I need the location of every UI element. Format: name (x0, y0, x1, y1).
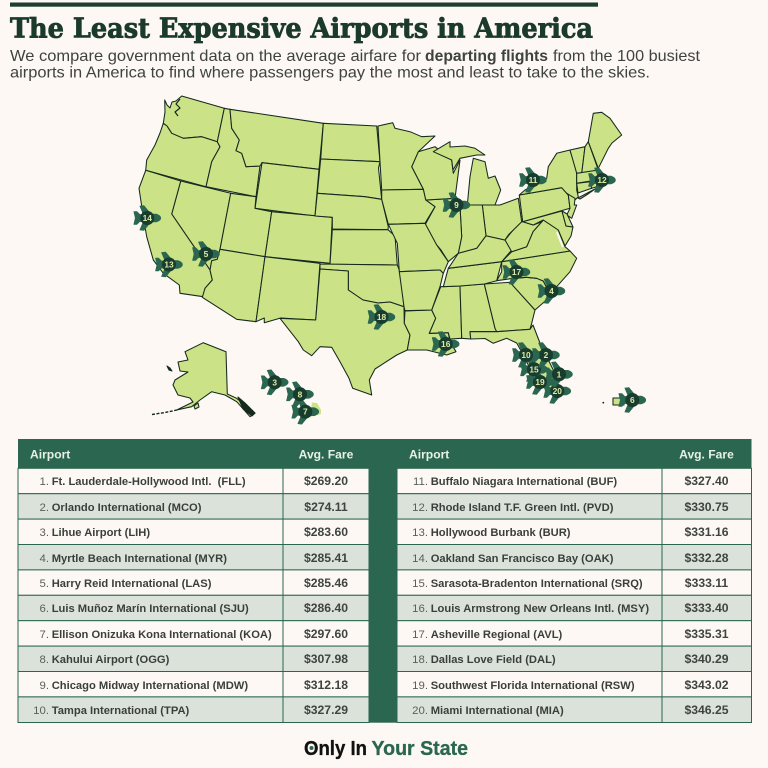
row 7: $297.60 (304, 627, 348, 641)
marker 10 Tampa (512, 342, 540, 368)
intro text: departing flights (425, 48, 548, 65)
row 16 (397, 595, 752, 621)
row 17 (397, 621, 752, 646)
left table rows (18, 468, 369, 722)
marker 13 Burbank: 13 (164, 260, 174, 270)
marker 8 Kahului (286, 382, 314, 407)
row 4: $285.41 (304, 551, 348, 565)
marker 18 Dallas: 18 (377, 312, 386, 322)
row 3 (18, 519, 369, 544)
row 10 (18, 697, 369, 722)
row 15: 15. (412, 578, 428, 590)
row 14: Oakland San Francisco Bay (OAK) (431, 553, 614, 565)
row 8: Kahului Airport (OGG) (52, 654, 170, 666)
row 17: $335.31 (684, 627, 729, 641)
header: left table: Avg. Fare (299, 448, 354, 462)
row 3: 3. (40, 527, 49, 539)
Alaska (152, 343, 255, 417)
marker 1 Ft. Lauderdale: 1 (557, 369, 562, 379)
row 1: $269.20 (304, 474, 348, 488)
marker 13 Burbank (156, 252, 182, 277)
marker 3 Lihue (261, 370, 288, 395)
marker 6 San Juan (619, 388, 646, 412)
row 16: Louis Armstrong New Orleans Intl. (MSY) (431, 603, 649, 615)
row 14 (397, 544, 752, 570)
row 4: Myrtle Beach International (MYR) (52, 553, 227, 565)
row 2: Orlando International (MCO) (52, 502, 202, 514)
marker 4 Myrtle Beach (538, 278, 565, 304)
logo: Your State (372, 737, 468, 760)
row 20: Miami International (MIA) (431, 705, 564, 717)
row 6 (18, 595, 369, 621)
row 18: Dallas Love Field (DAL) (431, 654, 556, 666)
row 1: 1. (40, 476, 49, 488)
row 8: 8. (40, 654, 49, 666)
row 7: 7. (40, 629, 49, 641)
row 12: 12. (412, 502, 428, 514)
marker 11 Buffalo (520, 168, 546, 192)
row 6: Luis Muñoz Marín International (SJU) (52, 603, 249, 615)
row 9 (18, 672, 369, 697)
row 2: 2. (40, 502, 49, 514)
marker 16 New Orleans: 16 (441, 339, 451, 349)
marker 4 Myrtle Beach: 4 (549, 286, 554, 296)
marker 17 Asheville (503, 260, 530, 284)
row 12: $330.75 (684, 500, 729, 514)
row 1: Ft. Lauderdale-Hollywood Intl. (FLL) (52, 476, 246, 488)
row 11: $327.40 (684, 474, 729, 488)
row 11: Buffalo Niagara International (BUF) (431, 476, 617, 488)
marker 14 Oakland (134, 206, 161, 230)
row 5: $285.46 (304, 576, 348, 590)
marker 5 Las Vegas (192, 242, 220, 266)
marker 9 Chicago (443, 192, 470, 218)
header: left table (30, 448, 354, 462)
top rule (10, 2, 598, 7)
row 20: $346.25 (684, 703, 729, 717)
marker 9 Chicago: 9 (454, 200, 459, 210)
row 15: $333.11 (685, 576, 728, 590)
marker 7 Kona (292, 399, 319, 424)
row 14: $332.28 (684, 551, 729, 565)
row 9: $312.18 (304, 678, 348, 692)
marker 5 Las Vegas: 5 (204, 249, 209, 259)
marker 19 Southwest Florida: 19 (535, 377, 545, 387)
row 1 (18, 468, 369, 494)
right table rows (397, 468, 752, 722)
row 15 (397, 570, 752, 595)
centre divider column (369, 468, 397, 723)
row 9: 9. (40, 680, 49, 692)
logo: Only In (304, 737, 367, 760)
row 19: $343.02 (684, 678, 729, 692)
row 3: $283.60 (304, 525, 348, 539)
row 11 (397, 468, 752, 494)
row 4 (18, 544, 369, 570)
row 16: $333.40 (684, 601, 729, 615)
small island dot (602, 402, 604, 404)
row 15: Sarasota-Bradenton International (SRQ) (431, 578, 643, 590)
header: right table: Avg. Fare (679, 448, 734, 462)
row 4: 4. (40, 553, 49, 565)
row 13: $331.16 (684, 525, 729, 539)
marker 20 Miami: 20 (553, 386, 562, 396)
marker 2 Orlando: 2 (544, 350, 549, 360)
row 10: $327.29 (304, 703, 348, 717)
row 12: Rhode Island T.F. Green Intl. (PVD) (431, 502, 614, 514)
marker 1 Ft. Lauderdale (546, 362, 572, 387)
marker 19 Southwest Florida (526, 370, 554, 394)
island shapes (310, 402, 321, 417)
marker 3 Lihue: 3 (272, 377, 277, 387)
intro text: We compare government data on the average airfare for (10, 48, 422, 65)
marker 10 Tampa: 10 (521, 350, 531, 360)
row 3: Lihue Airport (LIH) (52, 527, 150, 539)
row 17: 17. (412, 629, 428, 641)
marker 16 New Orleans (432, 332, 459, 356)
marker 15 Sarasota: 15 (529, 364, 539, 374)
intro text (10, 48, 701, 82)
marker 7 Kona: 7 (303, 407, 308, 417)
row 13: Hollywood Burbank (BUR) (431, 527, 571, 539)
marker 12 Providence (588, 168, 616, 192)
row 7 (18, 621, 369, 646)
marker 18 Dallas (368, 304, 395, 330)
row 2 (18, 494, 369, 519)
intro text: from the 100 busiest (553, 48, 701, 65)
row 11: 11. (413, 476, 428, 488)
row 6: $286.40 (304, 601, 348, 615)
row 19: Southwest Florida International (RSW) (431, 680, 635, 692)
row 18 (397, 646, 752, 672)
row 10: 10. (33, 705, 49, 717)
logo (304, 737, 468, 760)
marker 12 Providence: 12 (597, 175, 607, 185)
row 18: $340.29 (684, 652, 729, 666)
header: left table: Airport (30, 448, 70, 462)
row 12 (397, 494, 752, 519)
row 2: $274.11 (304, 500, 348, 514)
marker 2 Orlando (532, 342, 560, 368)
row 5: Harry Reid International (LAS) (52, 578, 212, 590)
header: right table: Airport (409, 448, 449, 462)
row 19 (397, 672, 752, 697)
row 5 (18, 570, 369, 595)
marker 14 Oakland: 14 (143, 213, 152, 223)
row 6: 6. (40, 603, 49, 615)
row 10: Tampa International (TPA) (52, 705, 190, 717)
row 16: 16. (412, 603, 428, 615)
row 7: Ellison Onizuka Kona International (KOA) (52, 629, 272, 641)
row 14: 14. (412, 553, 428, 565)
row 8: $307.98 (304, 652, 348, 666)
header: right table (409, 448, 734, 462)
row 20 (397, 697, 752, 722)
row 20: 20. (412, 705, 428, 717)
row 5: 5. (40, 578, 49, 590)
intro text: airports in America to find where passengers pay the most and least to take to the skies. (10, 64, 650, 82)
map of US states (139, 96, 624, 417)
row 13: 13. (412, 527, 428, 539)
row 18: 18. (412, 654, 428, 666)
row 8 (18, 646, 369, 672)
row 19: 19. (412, 680, 428, 692)
row 17: Asheville Regional (AVL) (431, 629, 563, 641)
marker 6 San Juan: 6 (630, 395, 635, 405)
marker 15 Sarasota (520, 357, 548, 382)
title: The Least Expensive Airports in America (10, 12, 593, 44)
table band (18, 439, 752, 468)
row 9: Chicago Midway International (MDW) (52, 680, 248, 692)
marker 17 Asheville: 17 (512, 267, 521, 277)
marker 8 Kahului: 8 (298, 389, 303, 399)
marker 20 Miami (544, 378, 571, 404)
marker 11 Buffalo: 11 (529, 175, 538, 185)
row 13 (397, 519, 752, 544)
